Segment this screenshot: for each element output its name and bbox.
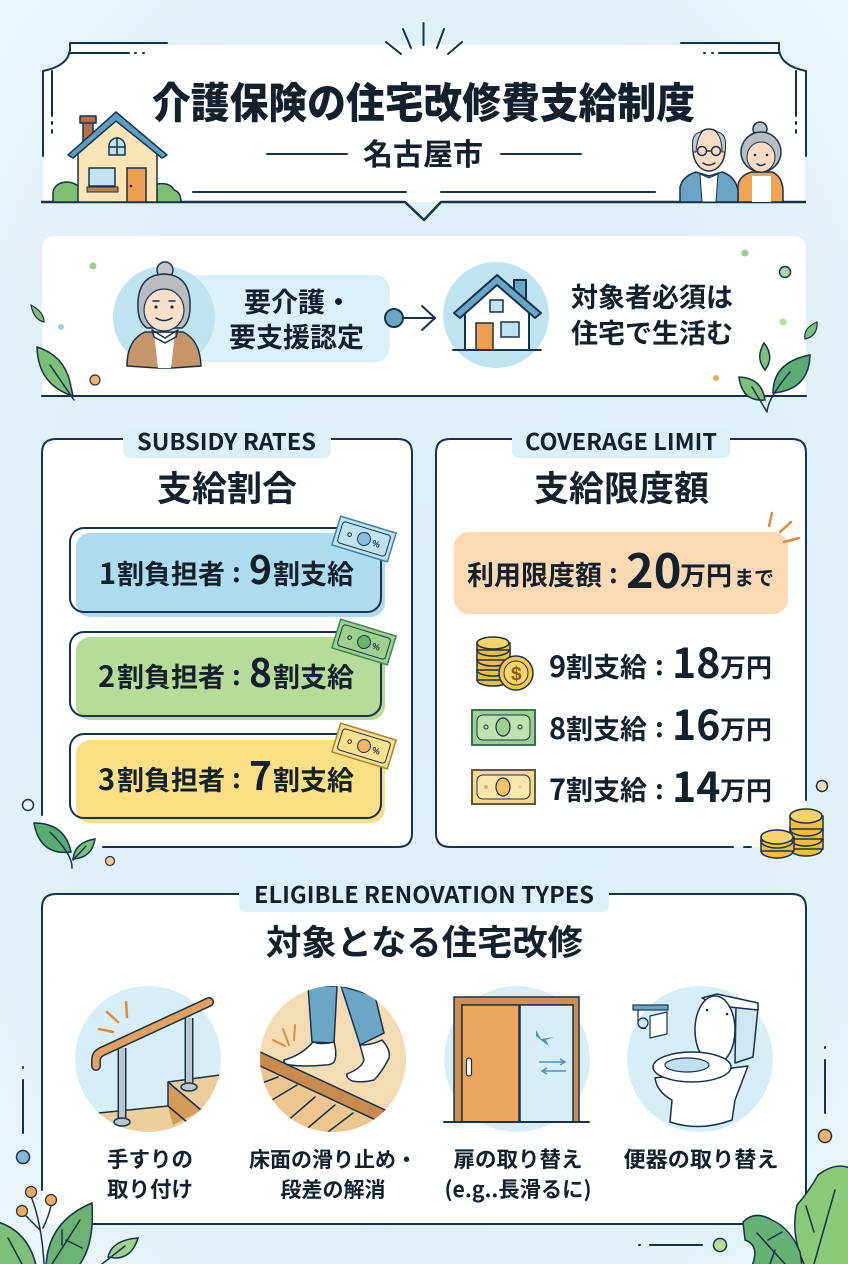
tab label: ELIGIBLE RENOVATION TYPES	[254, 876, 594, 910]
panel: subsidy rates	[42, 423, 412, 847]
icon: house	[53, 112, 181, 202]
rate row: 9: 9	[249, 540, 272, 596]
icon: coin stacks	[761, 780, 828, 858]
item label: toilet: 便器の取り替え	[624, 1143, 778, 1174]
panel: eligibility intro	[31, 236, 817, 412]
limit callout: 万円	[680, 556, 732, 593]
icon: banknote yellow	[332, 723, 396, 769]
rate row: 7: 7	[249, 746, 272, 802]
rate row: 8: 2	[98, 654, 115, 696]
amount row: 16: 割支給	[566, 708, 647, 747]
intro text right: 住宅で生活む	[571, 312, 733, 351]
item label: sliding door: 扉の取り替え	[453, 1143, 583, 1174]
amount row: 16: 16	[672, 692, 720, 752]
intro text left: 要支援認定	[229, 316, 364, 355]
limit callout: まで	[734, 562, 774, 591]
icon: banknote yellow: %	[371, 745, 381, 757]
icon: banknote blue	[332, 516, 396, 562]
rate row: 9: 割負担者	[117, 553, 225, 592]
amount row: 16: 万円	[720, 710, 772, 747]
amount row: 14	[472, 754, 772, 814]
panel: coverage limit	[436, 423, 806, 847]
icon: leaves left	[31, 305, 74, 400]
rate row: 9: 割支給	[273, 553, 354, 592]
icon: green banknote	[472, 710, 535, 745]
rate row: 9: :	[232, 551, 241, 590]
tab label: COVERAGE LIMIT	[525, 423, 717, 457]
heading: 支給限度額	[534, 461, 709, 512]
item label: sliding door: (e.g..長滑るに)	[444, 1173, 592, 1204]
icon: banknote green	[332, 619, 396, 665]
rate row: 9: 1	[99, 551, 116, 593]
rate row: 9	[70, 516, 396, 617]
limit callout: 利用限度額	[467, 554, 602, 593]
item: handrail	[75, 986, 221, 1132]
rate row: 8: 割負担者	[117, 656, 225, 695]
panel: eligible renovation types	[42, 876, 806, 1224]
icon: banknote blue: %	[371, 538, 381, 550]
sunburst accent	[386, 23, 462, 54]
limit callout: :	[609, 552, 618, 591]
rate row: 8	[70, 619, 396, 720]
amount row: 18: 9	[549, 644, 566, 686]
amount row: 18: $	[511, 664, 522, 685]
item label: floor and step: 段差の解消	[280, 1174, 386, 1204]
heading: 支給割合	[157, 461, 297, 512]
icon: elderly couple	[680, 122, 783, 202]
icon: sprout bottom left	[22, 800, 114, 868]
decorative dots	[58, 250, 790, 385]
rate row: 7: 3	[98, 757, 115, 799]
amount row: 18: 割支給	[566, 646, 647, 685]
amount row: 16: :	[655, 706, 664, 745]
icon: banknote green: %	[371, 641, 381, 653]
rate row: 8: :	[232, 654, 241, 693]
decoration: bottom left plant	[0, 1067, 138, 1264]
rate row: 8: 割支給	[273, 656, 354, 695]
amount row: 16	[472, 692, 772, 752]
toilet paper holder	[633, 1005, 668, 1038]
icon: yellow banknote	[472, 770, 535, 804]
arrow	[385, 306, 435, 330]
subtitle: 名古屋市	[363, 130, 483, 174]
amount row: 18: 18	[672, 630, 720, 690]
tab label: SUBSIDY RATES	[137, 423, 316, 457]
rate row: 7: :	[232, 757, 241, 796]
amount row: 18: 万円	[720, 648, 772, 685]
icon: home	[443, 262, 549, 368]
label pill	[175, 275, 390, 362]
item label: floor and step: 床面の滑り止め・	[249, 1144, 417, 1174]
item label: handrail: 取り付け	[107, 1173, 193, 1204]
rate row: 7: 割支給	[273, 759, 354, 798]
limit callout: 20	[626, 533, 681, 602]
decoration: bottom right plant	[639, 1047, 848, 1264]
header banner	[41, 23, 806, 220]
amount row: 14: 7	[549, 767, 566, 809]
icon: leaves right	[739, 322, 817, 412]
item: toilet	[627, 986, 773, 1132]
icon: elderly woman	[113, 262, 215, 368]
item: floor and step	[255, 986, 406, 1140]
amount row: 18: :	[655, 644, 664, 683]
amount row: 14: :	[655, 768, 664, 807]
amount row: 14: 割支給	[566, 769, 647, 808]
item: sliding door	[444, 986, 590, 1132]
amount row: 14: 14	[672, 754, 720, 814]
icon: coins	[477, 637, 533, 690]
amount row: 14: 万円	[720, 771, 772, 808]
heading: 対象となる住宅改修	[266, 915, 583, 966]
item label: handrail: 手すりの	[107, 1143, 193, 1174]
rate row: 7	[70, 723, 396, 823]
intro text right: 対象者必須は	[571, 276, 733, 315]
intro text left: 要介護・	[244, 281, 352, 320]
limit callout	[454, 513, 799, 614]
title: 介護保険の住宅改修費支給制度	[152, 70, 695, 131]
rate row: 8: 8	[249, 643, 272, 699]
amount row: 18	[477, 630, 772, 690]
rate row: 7: 割負担者	[117, 759, 225, 798]
amount row: 16: 8	[549, 706, 566, 748]
